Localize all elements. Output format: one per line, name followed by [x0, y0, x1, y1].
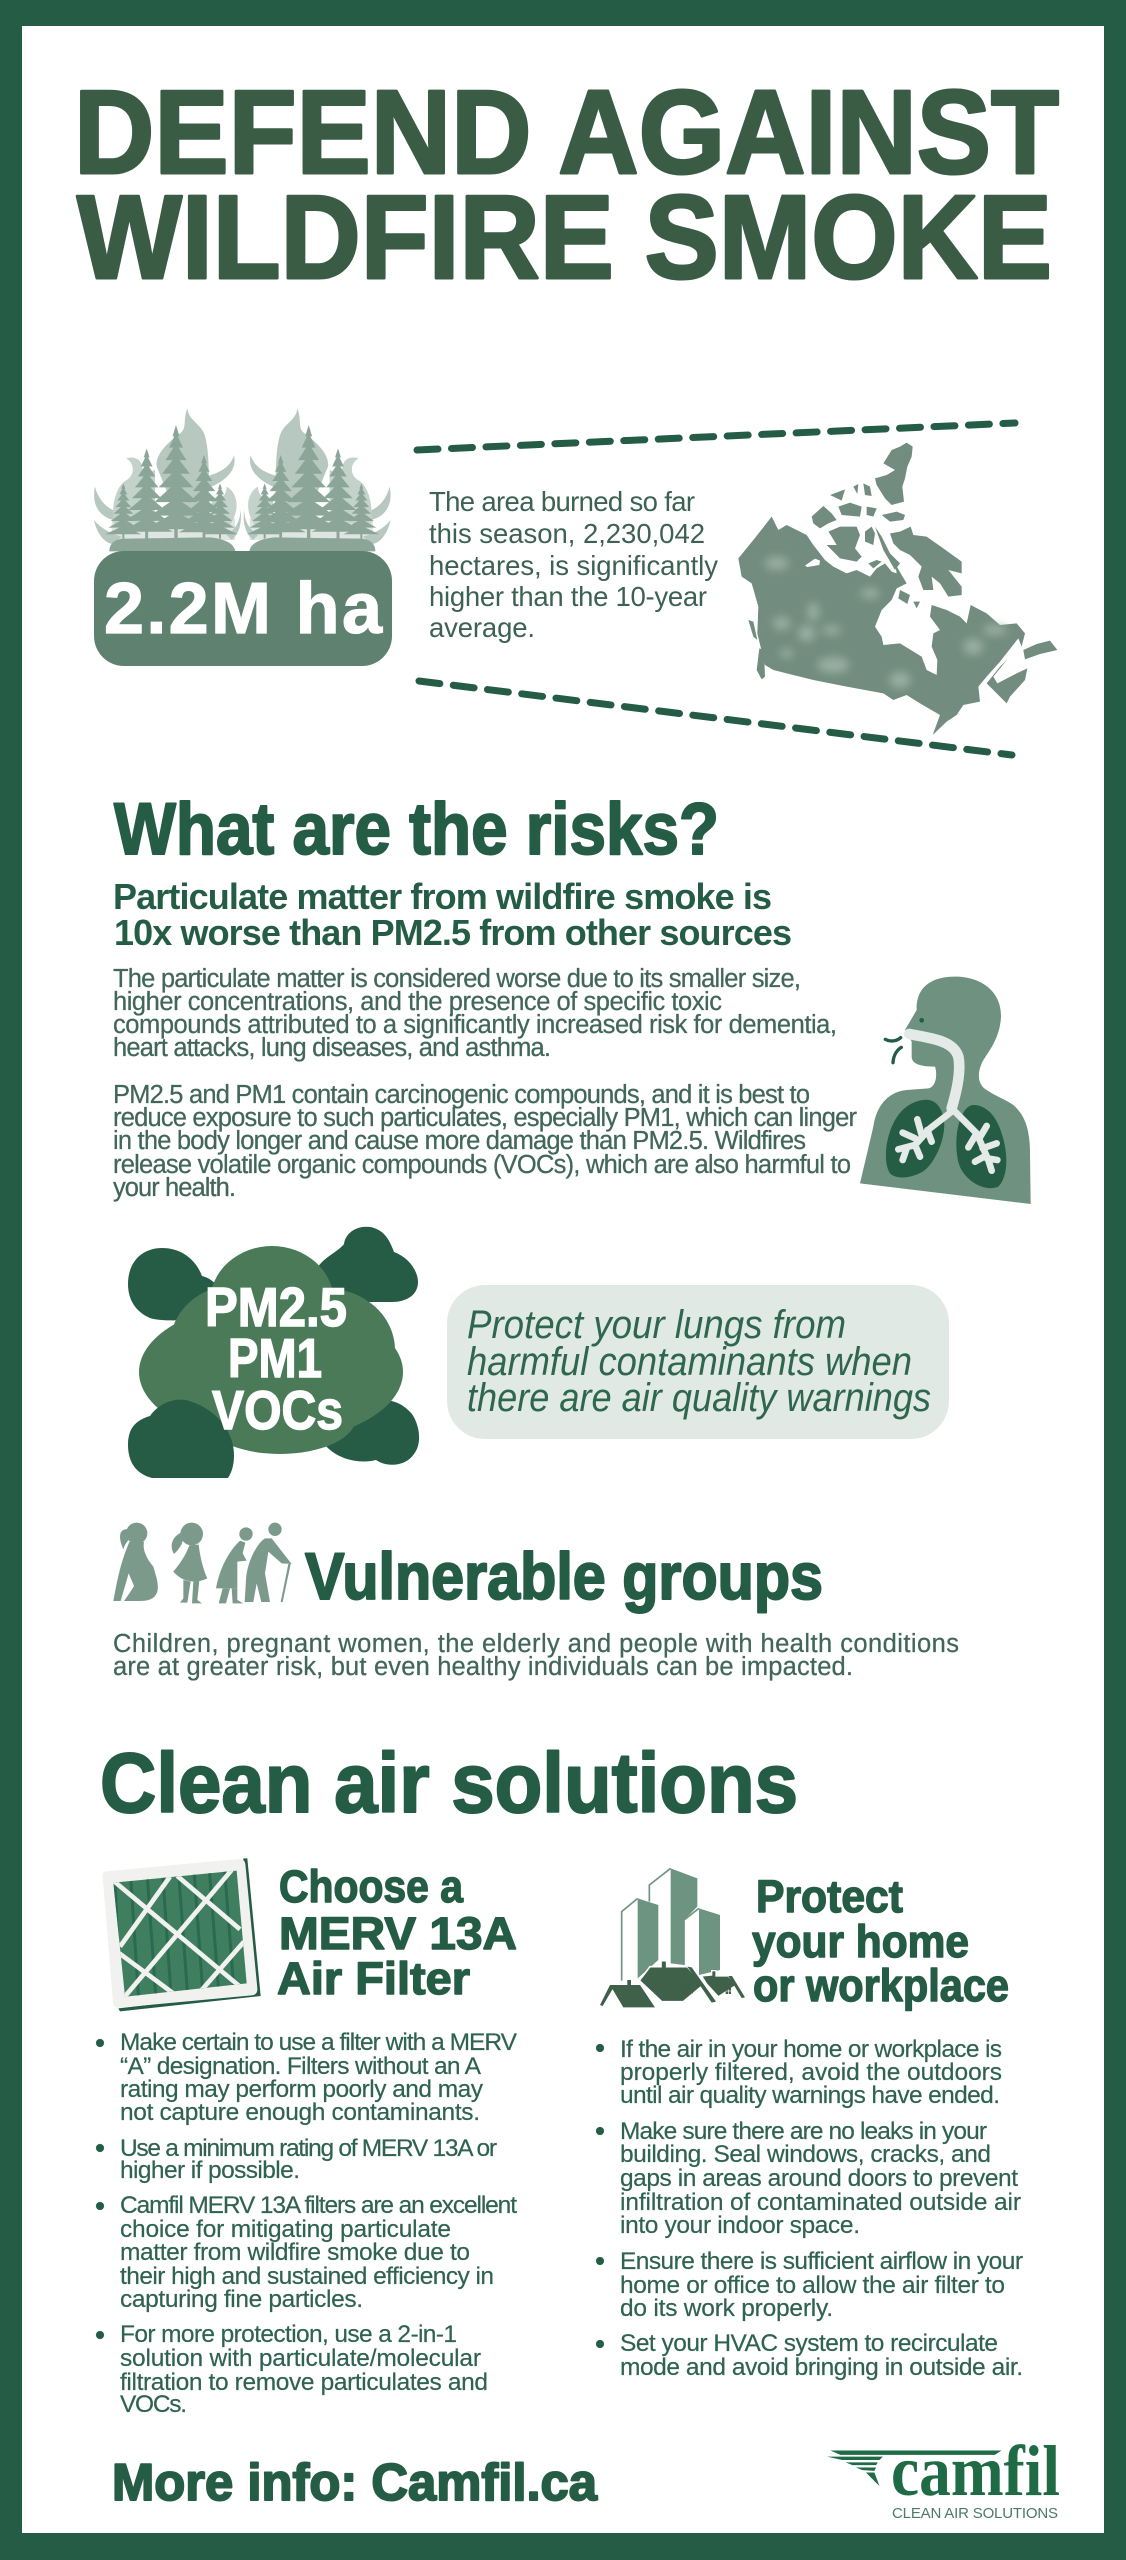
- dashed line bottom: [419, 681, 1012, 755]
- heading: choose a MERV 13A air filter: Air Filter: [277, 1953, 470, 2004]
- bullet list: home and workplace advice: Set your HVAC system to recirculate: [620, 2330, 998, 2357]
- heading: vulnerable groups: Vulnerable groups: [305, 1539, 823, 1613]
- logo: camfil: [827, 2431, 1060, 2522]
- vulnerable groups text: are at greater risk, but even healthy individuals can be impacted.: [113, 1653, 853, 1681]
- bullet list: filter advice: Make certain to use a filter with a MERV: [120, 2029, 518, 2056]
- bullet list: filter advice: choice for mitigating particulate: [120, 2216, 451, 2243]
- bullet list: home and workplace advice: [596, 2036, 1023, 2381]
- stat description text: higher than the 10-year: [429, 581, 707, 612]
- stat description text: average.: [429, 612, 535, 643]
- callout: protect your lungs: harmful contaminants when: [467, 1340, 912, 1384]
- pollutant labels: [205, 1276, 347, 1441]
- bottom left puff: [128, 1400, 234, 1478]
- bullet list: home and workplace advice: do its work properly.: [620, 2295, 833, 2322]
- icon: vulnerable people silhouettes: [113, 1523, 292, 1603]
- title: [74, 66, 1059, 304]
- bullet list: filter advice: solution with particulate/molecular: [120, 2345, 481, 2372]
- stat pill: 2.2M ha: [94, 551, 392, 666]
- subheading: Particulate matter from wildfire smoke is: [113, 876, 772, 917]
- body paragraph 2: reduce exposure to such particulates, especially PM1, which can linger: [113, 1104, 858, 1132]
- icon: particle cloud: [128, 1227, 419, 1478]
- bullet list: filter advice: filtration to remove particulates and: [120, 2369, 488, 2396]
- body paragraph 1: The particulate matter is considered worse due to its smaller size,: [113, 965, 801, 993]
- bullet list: filter advice: VOCs.: [120, 2391, 187, 2418]
- heading: what are the risks: What are the risks?: [114, 789, 719, 870]
- title: WILDFIRE SMOKE: [77, 171, 1052, 304]
- bullet list: home and workplace advice: into your indoor space.: [620, 2212, 860, 2239]
- main cloud: [139, 1246, 403, 1454]
- heading: protect your home or workplace: Protect: [756, 1871, 903, 1922]
- stat description text: [429, 486, 718, 643]
- body paragraph 2: your health.: [113, 1174, 236, 1202]
- bullet list: home and workplace advice: mode and avoid bringing in outside air.: [620, 2354, 1023, 2381]
- icon: burning forest trees: [94, 408, 391, 551]
- body paragraph 2: release volatile organic compounds (VOCs), which are also harmful to: [113, 1151, 851, 1179]
- bullet list: filter advice: Use a minimum rating of MERV 13A or: [120, 2135, 497, 2162]
- logo: camfil: camfil: [891, 2431, 1060, 2511]
- heading: protect your home or workplace: or workplace: [753, 1960, 1009, 2011]
- icon: air filter: [103, 1858, 261, 2011]
- pollutant labels: PM2.5: [205, 1276, 347, 1338]
- vulnerable groups text: Children, pregnant women, the elderly and people with health conditions: [113, 1630, 959, 1658]
- logo wing stripes: [827, 2451, 1002, 2486]
- bullet list: filter advice: higher if possible.: [120, 2157, 300, 2184]
- heading: choose a MERV 13A air filter: MERV 13A: [279, 1908, 517, 1959]
- pollutant labels: PM1: [228, 1327, 322, 1389]
- bullet list: filter advice: matter from wildfire smoke due to: [120, 2239, 470, 2266]
- body paragraph 1: heart attacks, lung diseases, and asthma.: [113, 1034, 551, 1062]
- body paragraph 2: [113, 1081, 858, 1202]
- title: DEFEND AGAINST: [74, 66, 1059, 199]
- heading: protect your home or workplace: [752, 1871, 1009, 2011]
- bullet list: home and workplace advice: infiltration of contaminated outside air: [620, 2189, 1021, 2216]
- footer link text: More info: Camfil.ca: [112, 2454, 598, 2512]
- dark cloud puffs: [128, 1227, 419, 1465]
- stat description text: hectares, is significantly: [429, 550, 718, 581]
- bullet list: filter advice: not capture enough contaminants.: [120, 2099, 480, 2126]
- stat pill: 2.2M ha: 2.2M ha: [104, 569, 383, 649]
- bullet list: home and workplace advice: properly filtered, avoid the outdoors: [620, 2059, 1002, 2086]
- vulnerable groups text: [113, 1630, 959, 1681]
- heading: protect your home or workplace: your home: [752, 1916, 969, 1967]
- body paragraph 2: PM2.5 and PM1 contain carcinogenic compounds, and it is best to: [113, 1081, 810, 1109]
- bullet list: home and workplace advice: until air quality warnings have ended.: [620, 2082, 1000, 2109]
- bullet list: home and workplace advice: If the air in your home or workplace is: [620, 2036, 1002, 2063]
- pollutant labels: VOCs: [212, 1379, 343, 1441]
- bullet list: home and workplace advice: building. Seal windows, cracks, and: [620, 2141, 991, 2168]
- bullet list: filter advice: For more protection, use a 2-in-1: [120, 2321, 457, 2348]
- bullet list: filter advice: [96, 2029, 518, 2418]
- stat description text: this season, 2,230,042: [429, 518, 705, 549]
- icon: human respiratory system: [860, 977, 1031, 1204]
- icon: city buildings and houses: [600, 1868, 745, 2007]
- bullet list: filter advice: Camfil MERV 13A filters are an excellent: [120, 2192, 517, 2219]
- bullet list: home and workplace advice: Ensure there is sufficient airflow in your: [620, 2248, 1023, 2275]
- dashed line top: [417, 423, 1015, 450]
- bullet list: filter advice: “A” designation. Filters without an A: [120, 2053, 482, 2080]
- bullet list: filter advice: rating may perform poorly and may: [120, 2076, 484, 2103]
- body paragraph 2: in the body longer and cause more damage than PM2.5. Wildfires: [113, 1127, 806, 1155]
- map of Canada: [738, 443, 1057, 735]
- stat description text: The area burned so far: [429, 486, 695, 517]
- callout: protect your lungs: Protect your lungs from: [467, 1303, 846, 1347]
- bullet list: filter advice: their high and sustained efficiency in: [120, 2263, 494, 2290]
- callout: protect your lungs: there are air quality warnings: [467, 1376, 931, 1420]
- subheading: 10x worse than PM2.5 from other sources: [114, 912, 792, 953]
- heading: clean air solutions: Clean air solutions: [100, 1736, 798, 1830]
- bullet list: filter advice: capturing fine particles.: [120, 2286, 363, 2313]
- heading: choose a MERV 13A air filter: [277, 1861, 517, 2004]
- bullet list: home and workplace advice: home or office to allow the air filter to: [620, 2272, 1005, 2299]
- subheading: [113, 876, 792, 953]
- body paragraph 1: higher concentrations, and the presence of specific toxic: [113, 988, 722, 1016]
- callout: protect your lungs: [447, 1285, 949, 1439]
- heading: choose a MERV 13A air filter: Choose a: [279, 1861, 464, 1912]
- bullet list: home and workplace advice: gaps in areas around doors to prevent: [620, 2165, 1018, 2192]
- body paragraph 1: [113, 965, 837, 1062]
- bullet list: home and workplace advice: Make sure there are no leaks in your: [620, 2118, 987, 2145]
- logo: camfil: CLEAN AIR SOLUTIONS: [892, 2505, 1058, 2522]
- body paragraph 1: compounds attributed to a significantly increased risk for dementia,: [113, 1011, 837, 1039]
